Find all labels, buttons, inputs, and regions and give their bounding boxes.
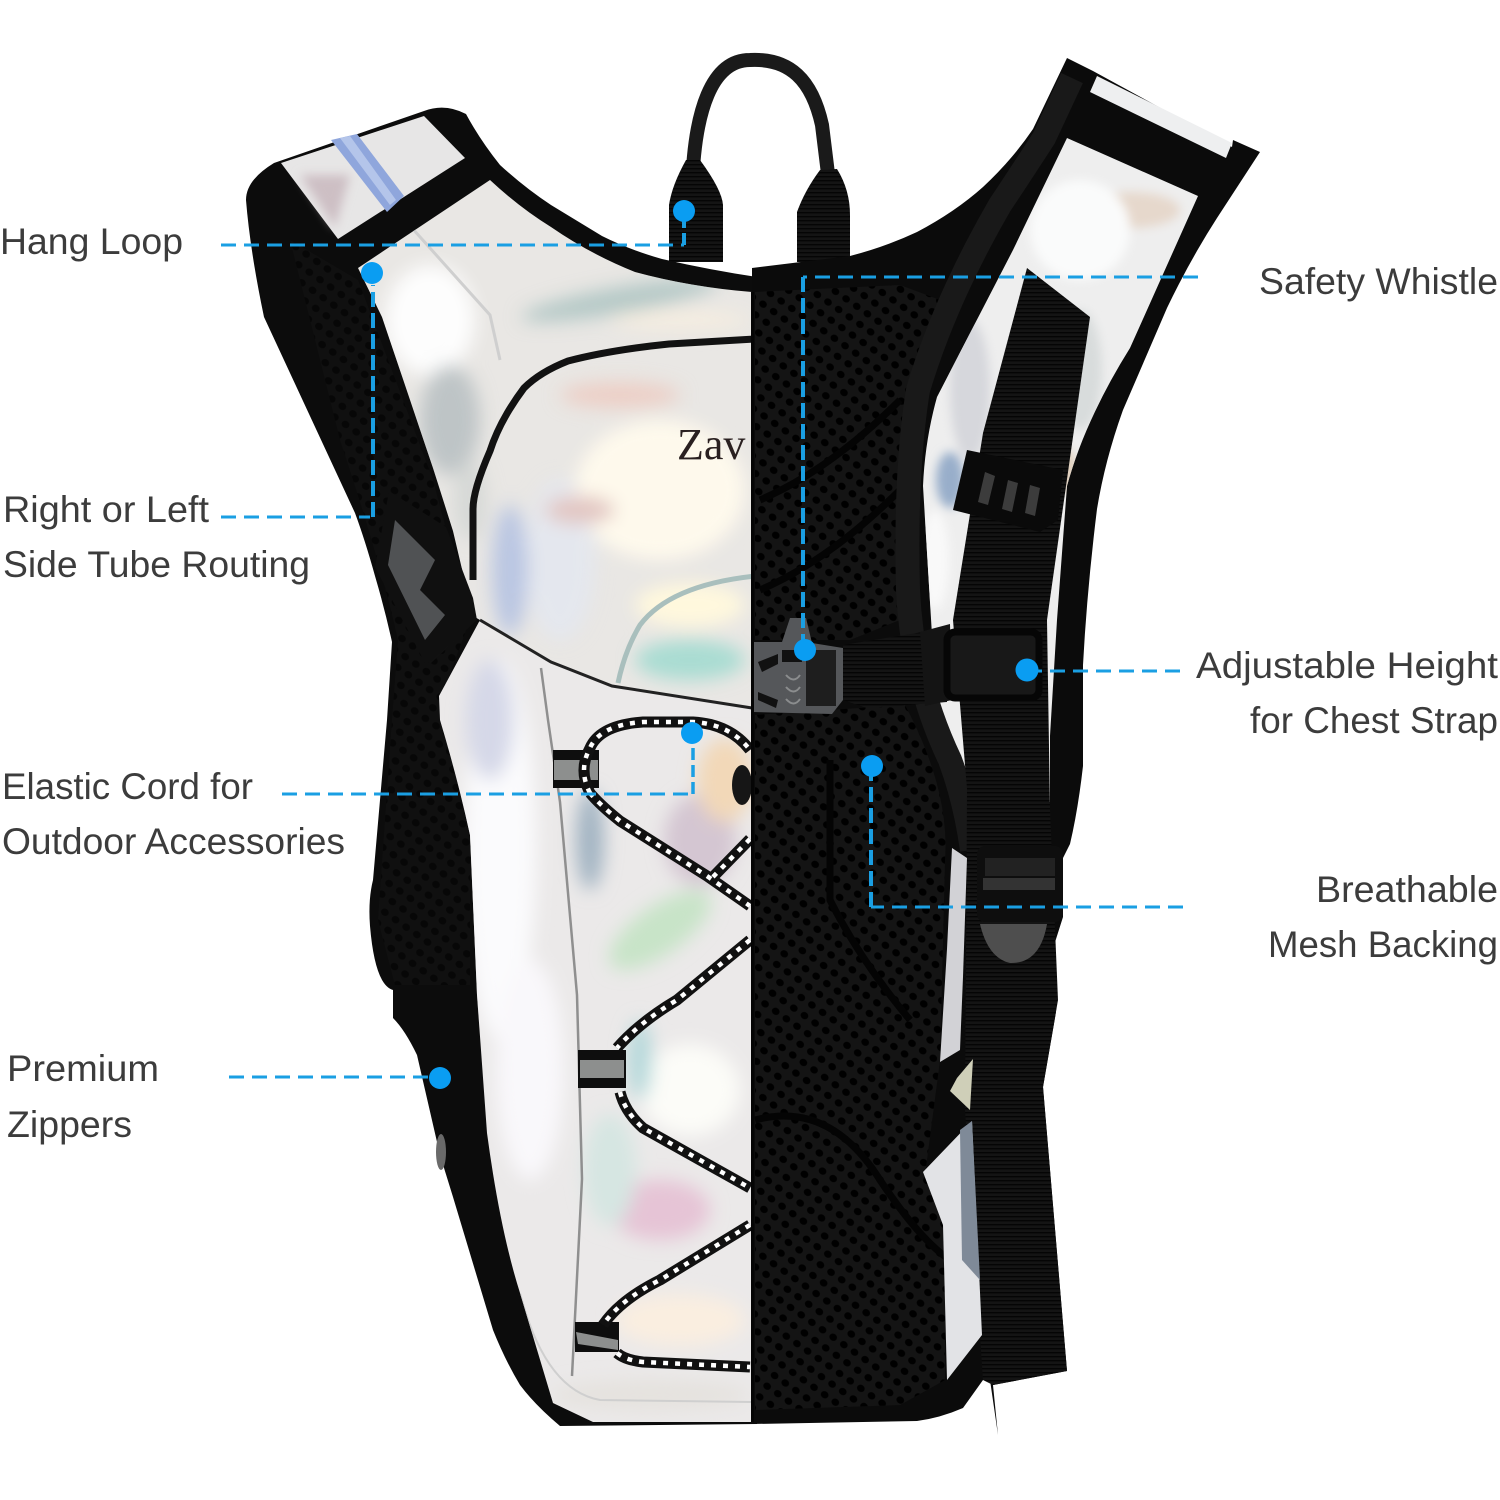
callout: premium zippers: Premium [7,1048,159,1089]
callout: breathable mesh [861,755,1498,965]
callout: adjustable height: Adjustable Height [1196,645,1499,686]
callout: elastic cord: Elastic Cord for [2,766,253,807]
callout: elastic cord: Outdoor Accessories [2,821,345,862]
callout: premium zippers [7,1048,451,1145]
silver shoulder strip with blue drink tube [281,116,465,239]
breathable mesh back panel [755,285,946,1410]
cord lock [732,765,752,805]
callout: tube routing [3,262,383,585]
callout: tube routing: Side Tube Routing [3,544,310,585]
right strap webbing [953,268,1090,1385]
chest strap [843,628,947,708]
mesh padding creases [755,400,950,1260]
callout: adjustable height [1016,645,1499,741]
safety whistle buckle [753,618,843,714]
brand name: Zav [677,420,745,469]
backpack illustration [246,58,1260,1435]
right half black silhouette [752,58,1260,1435]
chest strap adjuster [920,624,1039,706]
lower slider buckle [977,846,1063,963]
front panel fold line [541,668,582,1376]
callout: tube routing: Right or Left [3,489,210,530]
shoulder strap binding [907,78,1072,850]
silver front pocket [430,610,760,1430]
reflective tabs [553,750,626,1352]
callout: breathable mesh: Mesh Backing [1268,924,1498,965]
left side mesh panel [290,240,470,985]
elastic cord [584,722,752,1367]
right shoulder strap silver lining [920,130,1210,810]
small tube clip nub [436,1134,446,1170]
pocket zipper [473,339,755,580]
hang loop handle [669,60,850,262]
callout: breathable mesh: Breathable [1316,869,1498,910]
pocket top edge [480,620,752,708]
lower strap silver pieces [923,848,982,1380]
silver strap top tip [1090,76,1232,158]
pocket inner arc seam [618,576,755,683]
callout: premium zippers: Zippers [7,1104,132,1145]
shoulder seam [412,228,500,360]
silver main panel [358,180,752,706]
strap ladder buckle [953,450,1063,532]
callout: safety whistle [794,261,1498,661]
centre seam [751,292,754,1422]
side release buckle [375,491,477,665]
left half black silhouette [246,108,757,1426]
callout: safety whistle: Safety Whistle [1259,261,1498,302]
callout: hang loop: Hang Loop [0,221,183,262]
callout: adjustable height: for Chest Strap [1250,700,1498,741]
callout: elastic cord [2,722,703,862]
callout: hang loop [0,200,695,262]
